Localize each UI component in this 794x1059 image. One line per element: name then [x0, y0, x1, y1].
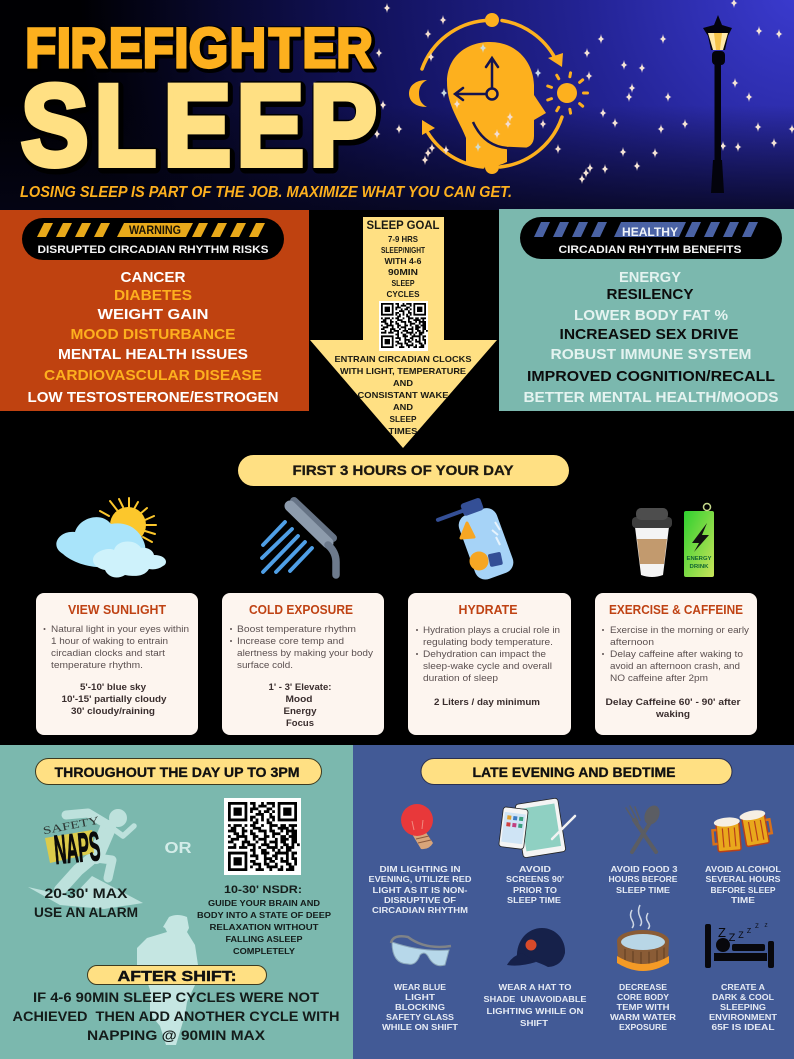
text: warm water: WARM WATER	[610, 1012, 677, 1022]
warning badge: DISRUPTED CIRCADIAN RHYTHM RISKS	[38, 244, 268, 256]
text: avoid screens: SLEEP TIME	[507, 895, 561, 905]
text: blue light glasses: BLOCKING	[395, 1002, 445, 1012]
icon: running silhouette	[28, 809, 143, 909]
icon: wooden tub	[617, 905, 669, 971]
nsdr text: BODY INTO A STATE OF DEEP	[197, 910, 331, 920]
benefit list: BETTER MENTAL HEALTH/MOODS	[524, 389, 778, 406]
nsdr text: 10-30' NSDR:	[224, 884, 302, 896]
text: avoid screens	[506, 864, 564, 905]
card: hydrate: HYDRATE	[458, 602, 518, 617]
nap duration: 20-30' MAX	[44, 886, 128, 901]
card: cold exposure: COLD EXPOSURE	[249, 602, 353, 617]
icon: sleeping in bed: Z	[755, 924, 759, 930]
text: avoid alcohol: TIME	[731, 895, 755, 905]
text: avoid food: AVOID FOOD 3	[610, 864, 678, 874]
card: exercise and caffeine: EXERCISE & CAFFEINE	[609, 602, 743, 617]
qr code: nsdr	[224, 798, 301, 875]
panel: throughout the day	[0, 745, 353, 1059]
title: firefighter: FIREFIGHTER	[27, 19, 374, 81]
nap duration: USE AN ALARM	[34, 905, 138, 920]
after shift text: IF 4-6 90MIN SLEEP CYCLES WERE NOT	[33, 990, 320, 1005]
safety naps logo: SAFETY	[42, 815, 100, 837]
panel: circadian risks	[0, 210, 309, 411]
arrow: sleep goal: CYCLES	[386, 289, 420, 299]
text: avoid food	[608, 864, 678, 895]
heading: after shift	[88, 966, 266, 985]
text: avoid alcohol: AVOID ALCOHOL	[705, 864, 781, 874]
arrow: sleep goal: SLEEP	[390, 414, 417, 424]
card: exercise and caffeine: Exercise in the morning or early	[610, 625, 750, 635]
header band	[0, 0, 794, 210]
text: dim lighting: CIRCADIAN RHYTHM	[372, 905, 468, 915]
arrow: sleep goal: 7-9 HRS	[388, 234, 418, 244]
text: blue light glasses: WHILE ON SHIFT	[382, 1022, 459, 1032]
title: sleep: SLEEP	[23, 63, 379, 191]
text: avoid alcohol: SEVERAL HOURS	[706, 874, 781, 884]
icon: coffee and energy drink: DRINK	[690, 564, 709, 570]
panel: circadian benefits	[499, 209, 794, 411]
text: wear a hat: WEAR A HAT TO	[498, 982, 572, 992]
card: exercise and caffeine	[595, 593, 757, 735]
after shift text: NAPPING @ 90MIN MAX	[87, 1028, 265, 1043]
heading: throughout the day: THROUGHOUT THE DAY UP TO 3PM	[54, 765, 300, 780]
text: dim lighting: LIGHT AS IT IS NON-	[372, 885, 468, 895]
icon: coffee and energy drink	[632, 504, 714, 577]
or label: OR	[164, 840, 192, 857]
card: hydrate: sleep-wake cycle and overall	[423, 661, 552, 671]
icon: shower head	[262, 501, 336, 575]
icon: safety glasses	[391, 936, 451, 966]
text: avoid screens: PRIOR TO	[513, 885, 557, 895]
card: exercise and caffeine: waking	[655, 709, 690, 719]
heading: first 3 hours: FIRST 3 HOURS OF YOUR DAY	[292, 462, 514, 478]
starry sky	[374, 0, 794, 184]
card: exercise and caffeine: NO caffeine after 2pm	[610, 673, 708, 683]
nsdr text: RELAXATION WITHOUT	[210, 922, 319, 932]
text: blue light glasses: WEAR BLUE	[394, 982, 446, 992]
card: cold exposure: Mood	[286, 694, 312, 704]
heading: throughout the day	[36, 758, 322, 784]
icon: sun and clouds	[56, 498, 166, 577]
warning badge: WARNING	[129, 225, 181, 237]
text: avoid food: HOURS BEFORE	[608, 874, 678, 884]
tagline: LOSING SLEEP IS PART OF THE JOB. MAXIMIZE WHAT YOU CAN GET.	[20, 184, 512, 201]
card: exercise and caffeine: afternoon	[610, 637, 654, 647]
qr code: sleep goal	[379, 301, 428, 351]
card: cold exposure: surface cold.	[237, 660, 293, 670]
card: hydrate: 2 Liters / day minimum	[434, 697, 540, 707]
nsdr text: FALLING ASLEEP	[226, 934, 303, 944]
icon: water bottle	[436, 494, 516, 588]
text: warm water: TEMP WITH	[616, 1002, 670, 1012]
arrow: sleep goal: AND	[393, 378, 413, 388]
nsdr text: GUIDE YOUR BRAIN AND	[208, 898, 320, 908]
after shift text: ACHIEVED THEN ADD ANOTHER CYCLE WITH	[12, 1009, 340, 1024]
text: avoid screens: SCREENS 90'	[506, 874, 564, 884]
icon: sleeping in bed: Z	[729, 932, 736, 944]
text: dark and cool: SLEEPING	[720, 1002, 766, 1012]
card: hydrate: regulating body temperature.	[423, 637, 553, 647]
text: wear a hat: LIGHTING WHILE ON	[486, 1006, 584, 1016]
text: avoid screens: AVOID	[519, 864, 551, 874]
text: dim lighting: DIM LIGHTING IN	[380, 864, 460, 874]
text: dark and cool: CREATE A	[721, 982, 765, 992]
risk list: DIABETES	[114, 287, 192, 304]
arrow: sleep goal: TIMES	[388, 426, 418, 436]
benefit list: INCREASED SEX DRIVE	[560, 326, 738, 343]
icon: lamp post	[703, 15, 732, 193]
risk list: LOW TESTOSTERONE/ESTROGEN	[28, 389, 278, 406]
text: avoid alcohol	[705, 864, 781, 905]
arrow: sleep goal: WITH 4-6	[384, 256, 422, 266]
healthy badge: CIRCADIAN RHYTHM BENEFITS	[558, 244, 742, 256]
card: cold exposure: Energy	[284, 706, 316, 716]
card: view sunlight: 1 hour of waking to entrain	[51, 636, 168, 646]
arrow: sleep goal: WITH LIGHT, TEMPERATURE	[340, 366, 466, 376]
card: hydrate	[408, 593, 571, 735]
card: hydrate: Hydration plays a crucial role in	[423, 625, 560, 635]
card: view sunlight: 10'-15' partially cloudy	[62, 694, 166, 704]
text: blue light glasses: SAFETY GLASS	[386, 1012, 454, 1022]
healthy badge: HEALTHY	[622, 227, 678, 239]
heading: late evening: LATE EVENING AND BEDTIME	[472, 765, 676, 780]
title: sleep: SLEEP	[21, 61, 377, 189]
benefit list: IMPROVED COGNITION/RECALL	[527, 368, 775, 385]
icon: sleeping in bed: Z	[718, 925, 726, 940]
heading: late evening	[421, 758, 732, 784]
text: dark and cool: DARK & COOL	[712, 992, 774, 1002]
text: warm water	[610, 982, 677, 1032]
text: warm water: CORE BODY	[617, 992, 669, 1002]
card: view sunlight: 30' cloudy/raining	[71, 706, 155, 716]
card: view sunlight: VIEW SUNLIGHT	[68, 602, 166, 617]
card: hydrate: duration of sleep	[423, 673, 498, 683]
card: hydrate: Dehydration can impact the	[423, 649, 546, 659]
card: view sunlight	[36, 593, 198, 735]
nap duration	[34, 886, 138, 920]
icon: hat	[507, 928, 565, 967]
card: cold exposure: Focus	[286, 718, 314, 728]
card: view sunlight: Natural light in your eyes within	[51, 624, 189, 634]
benefit list: ENERGY	[619, 269, 681, 286]
risk list	[28, 269, 278, 406]
arrow: sleep goal: AND	[393, 402, 413, 412]
text: dark and cool: ENVIRONMENT	[709, 1012, 778, 1022]
card: exercise and caffeine: Delay Caffeine 60' - 90' after	[606, 697, 741, 707]
title: firefighter: FIREFIGHTER	[25, 18, 373, 80]
card: view sunlight: 5'-10' blue sky	[80, 682, 146, 692]
card: cold exposure: 1' - 3' Elevate:	[268, 682, 332, 692]
text: blue light glasses	[382, 982, 459, 1032]
text: warm water: DECREASE	[619, 982, 667, 992]
nsdr text: COMPLETELY	[233, 946, 295, 956]
icon: sleeping in bed: Z	[747, 928, 752, 935]
risk list: CANCER	[120, 269, 186, 286]
text: dim lighting: DISRUPTIVE OF	[384, 895, 456, 905]
benefit list: ROBUST IMMUNE SYSTEM	[550, 346, 752, 363]
arrow: sleep goal: SLEEP GOAL	[366, 218, 440, 232]
risk list: MENTAL HEALTH ISSUES	[58, 346, 248, 363]
card: exercise and caffeine: Delay caffeine after waking to	[610, 649, 743, 659]
icon: circadian head with clock	[409, 13, 592, 174]
heading: first 3 hours	[238, 455, 569, 486]
risk list: MOOD DISTURBANCE	[70, 326, 236, 343]
card: exercise and caffeine: avoid an afternoon crash, and	[610, 661, 740, 671]
arrow: sleep goal: ENTRAIN CIRCADIAN CLOCKS	[334, 354, 472, 364]
text: dim lighting	[368, 864, 472, 915]
panel: throughout the day: NAPS	[52, 823, 102, 873]
text: avoid food: SLEEP TIME	[616, 885, 670, 895]
card: view sunlight: circadian clocks and start	[51, 648, 166, 658]
card: cold exposure: Increase core temp and	[237, 636, 344, 646]
icon: firefighter silhouette	[137, 915, 198, 1045]
risk list: CARDIOVASCULAR DISEASE	[44, 367, 262, 384]
text: wear a hat	[484, 982, 587, 1028]
icon: beer mugs	[711, 808, 773, 852]
heading: after shift: AFTER SHIFT:	[118, 968, 236, 985]
benefit list	[524, 269, 778, 406]
safety naps logo	[42, 815, 102, 873]
benefit list: LOWER BODY FAT %	[574, 307, 728, 324]
icon: fork and spoon	[626, 803, 663, 852]
after shift text	[12, 990, 340, 1043]
card: cold exposure	[222, 593, 384, 735]
icon: sleeping in bed	[705, 923, 774, 968]
arrow: sleep goal: CONSISTANT WAKE	[358, 390, 449, 400]
icon: sleeping in bed: Z	[738, 930, 744, 940]
warning badge	[22, 218, 284, 260]
nsdr text	[197, 884, 331, 956]
icon: red bulb	[401, 804, 433, 849]
arrow: sleep goal: SLEEP/NIGHT	[381, 245, 426, 255]
panel: late evening	[353, 745, 794, 1059]
text: warm water: EXPOSURE	[619, 1022, 667, 1032]
benefit list: RESILENCY	[606, 286, 694, 303]
text: blue light glasses: LIGHT	[405, 992, 436, 1002]
text: dark and cool: 65F IS IDEAL	[712, 1022, 774, 1032]
text: avoid alcohol: BEFORE SLEEP	[710, 885, 776, 895]
icon: phone and tablet	[499, 798, 575, 858]
icon: coffee and energy drink: ENERGY	[686, 556, 712, 562]
card: cold exposure: Boost temperature rhythm	[237, 624, 356, 634]
healthy badge	[520, 217, 782, 259]
text: dark and cool	[709, 982, 778, 1032]
text: wear a hat: SHADE UNAVOIDABLE	[484, 994, 587, 1004]
icon: sleeping in bed: Z	[764, 923, 768, 929]
arrow: sleep goal	[310, 217, 497, 448]
text: dim lighting: EVENING, UTILIZE RED	[368, 874, 472, 884]
arrow: sleep goal: 90MIN	[388, 267, 418, 277]
card: view sunlight: temperature rhythm.	[51, 660, 143, 670]
risk list: WEIGHT GAIN	[98, 306, 208, 323]
text: wear a hat: SHIFT	[520, 1018, 549, 1028]
arrow: sleep goal: SLEEP	[392, 278, 415, 288]
card: cold exposure: alertness by making your body	[237, 648, 374, 658]
